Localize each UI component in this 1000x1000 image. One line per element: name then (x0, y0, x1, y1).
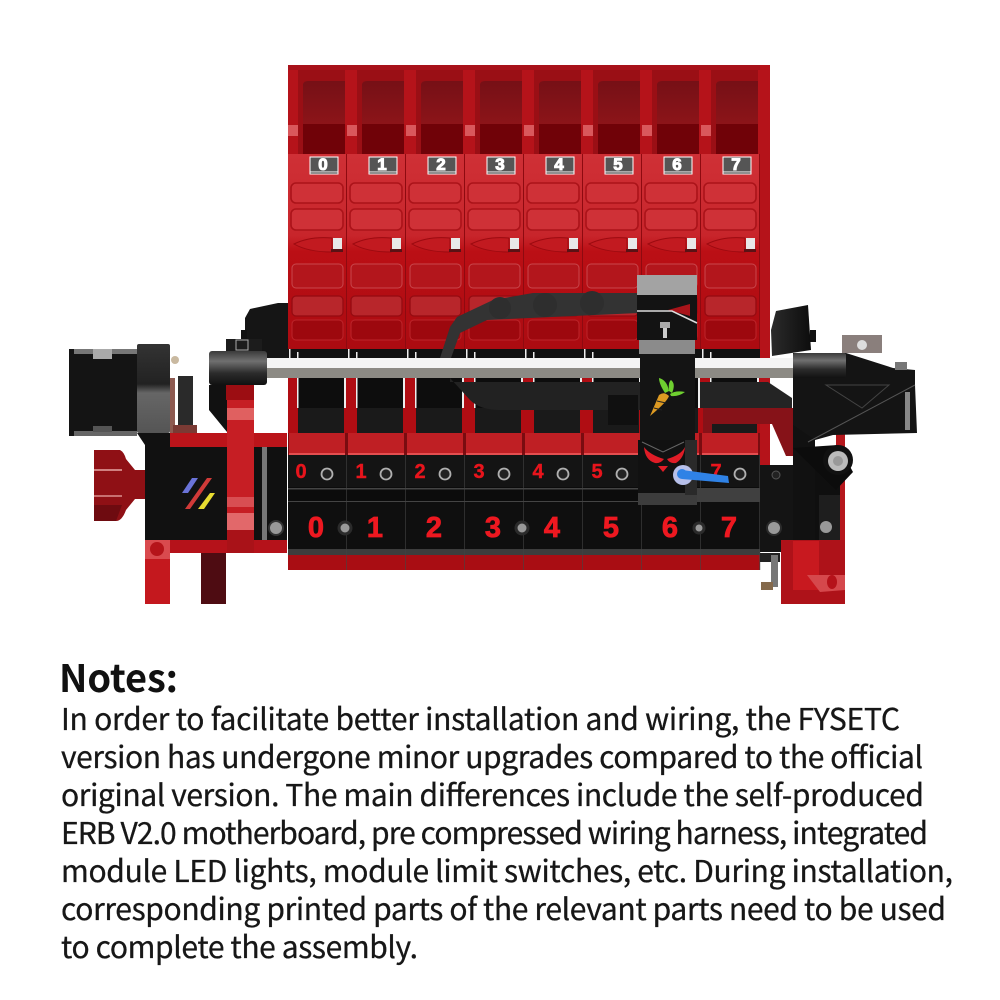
red bracket under right chain (703, 408, 793, 456)
small red number row (295, 461, 722, 483)
notes paragraph (61, 695, 953, 967)
steel rod (262, 358, 794, 378)
left stepper motor (69, 344, 197, 436)
icon: bird face logo (642, 442, 685, 472)
small red number row: 7 (710, 461, 722, 483)
small red number row: 4 (532, 461, 544, 483)
top number labels 0-7: 3 (495, 155, 505, 174)
drag chain lower (450, 378, 792, 425)
right adjuster knob (771, 305, 816, 356)
top number labels 0-7: 6 (672, 155, 682, 174)
left rod clamp (209, 339, 267, 385)
notes paragraph: module LED lights, module limit switches, etc. During installation, (61, 847, 953, 891)
blue tube fitting (673, 465, 729, 485)
small red number row: 1 (355, 461, 367, 483)
large red number row: 2 (426, 512, 442, 544)
carriage upper bracket (637, 275, 697, 340)
drag chain upper (440, 291, 640, 358)
top number labels 0-7: 2 (436, 155, 446, 174)
small red number row: 0 (295, 461, 307, 483)
notes paragraph: to complete the assembly. (61, 923, 418, 967)
large red number row: 7 (721, 512, 737, 544)
large red number row: 3 (485, 512, 501, 544)
top number labels 0-7: 4 (554, 155, 564, 174)
notes paragraph: version has undergone minor upgrades compared to the official (61, 733, 923, 777)
large red number row: 0 (308, 512, 324, 544)
small red number row: 5 (591, 461, 603, 483)
filament module bank (288, 65, 770, 570)
large red number row: 5 (603, 512, 619, 544)
icon: carrot (650, 378, 685, 416)
top number labels 0-7: 1 (377, 155, 387, 174)
screws on front rail (339, 522, 704, 534)
large red number row (308, 512, 737, 544)
top number labels 0-7 (310, 155, 751, 174)
top number labels 0-7: 7 (731, 155, 741, 174)
heading: Notes: Notes: (59, 648, 178, 703)
black adjuster knob left (241, 303, 288, 358)
right limit block (760, 465, 794, 552)
large red number row: 6 (662, 512, 678, 544)
red tension knob left (94, 450, 145, 521)
large red number row: 4 (544, 512, 560, 544)
carriage main block (638, 340, 760, 505)
logo: three coloured stripes (182, 478, 215, 509)
large red number row: 1 (367, 512, 383, 544)
notes paragraph: original version. The main differences include the self-produced (61, 771, 924, 815)
top number labels 0-7: 0 (318, 155, 328, 174)
small red number row: 3 (473, 461, 485, 483)
notes paragraph: corresponding printed parts of the relevant parts need to be used (61, 885, 946, 929)
notes paragraph: In order to facilitate better installation and wiring, the FYSETC (61, 695, 900, 739)
top number labels 0-7: 5 (613, 155, 623, 174)
notes paragraph: ERB V2.0 motherboard, pre compressed wiring harness, integrated (61, 809, 928, 853)
right frame and idler (760, 335, 917, 604)
small red number row: 2 (414, 461, 426, 483)
left frame housing (137, 385, 287, 604)
